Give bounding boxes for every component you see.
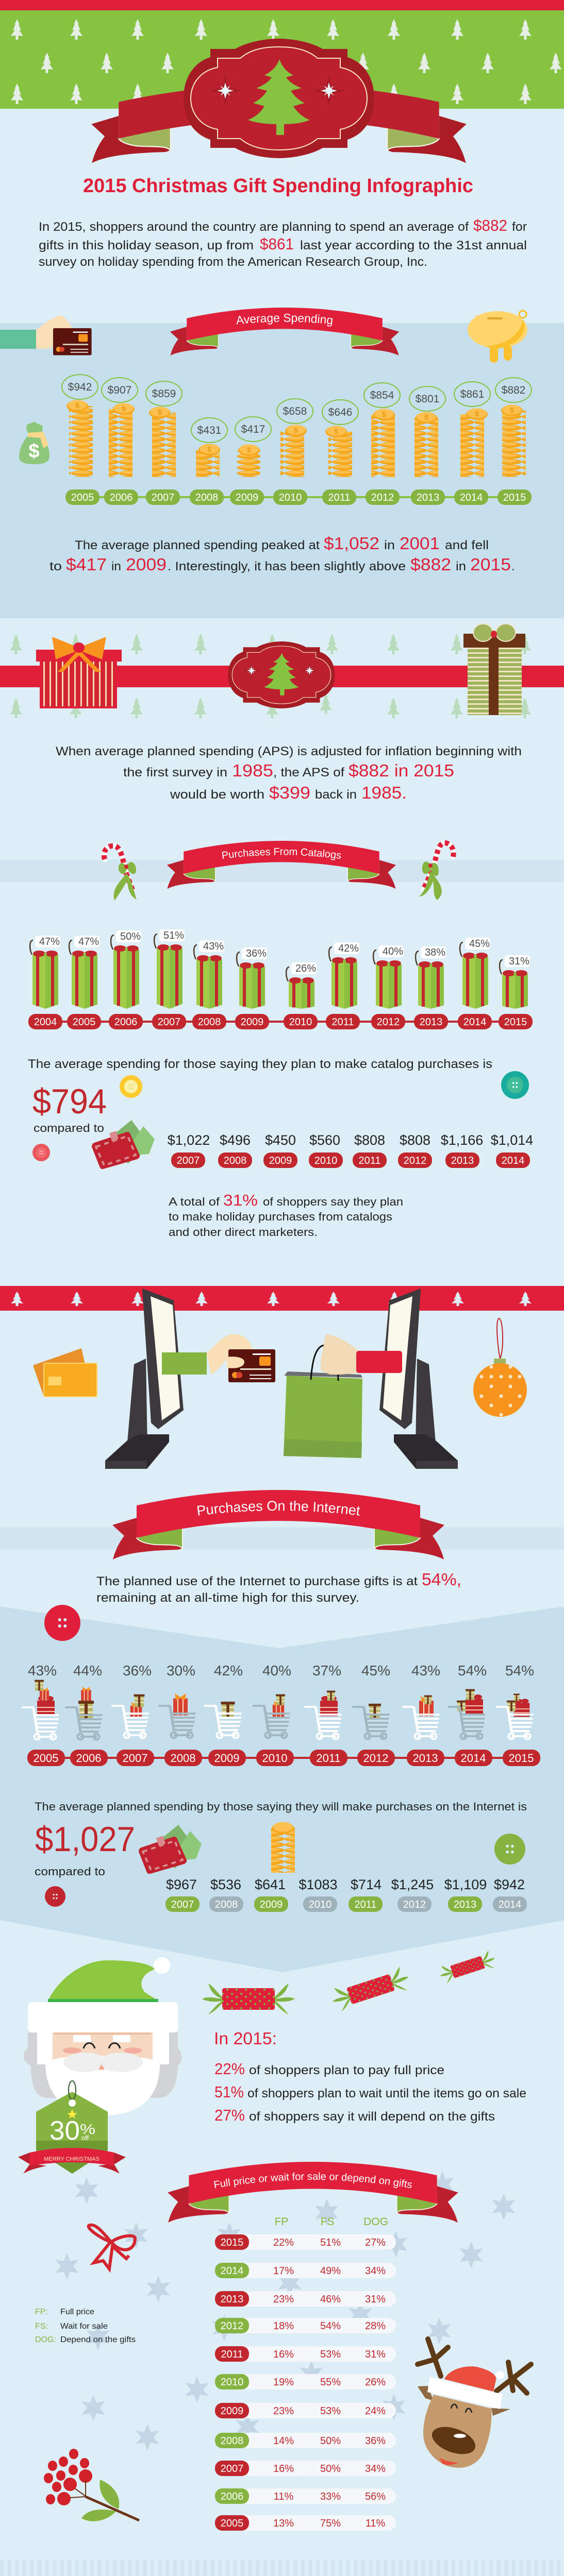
- figure: $1,027: $1,027: [35, 1820, 135, 1859]
- table: full price, wait for sale, depend on gifts by year: 22%: [273, 2237, 294, 2248]
- coin value labels: $658: [283, 405, 307, 417]
- banner: Purchases From Catalogs: [167, 841, 396, 889]
- timeline: 2005-2015 green: 2010: [279, 492, 302, 503]
- text: peak spending: in: [456, 560, 466, 573]
- coin value labels: $431: [197, 425, 221, 436]
- timeline: 2005-2015 green: 2011: [328, 492, 351, 503]
- table: full price, wait for sale, depend on gifts by year: 75%: [320, 2518, 341, 2529]
- chart: gift bars catalog purchases: 51%: [163, 930, 184, 941]
- chart: coin stacks of average spending: $: [247, 446, 251, 454]
- text: peak spending: $417: [66, 555, 107, 574]
- timeline: 2005-2015 red internet: 2014: [461, 1752, 486, 1765]
- text: internet spending: The average planned spending by those saying they will make purchases on the Internet is: [35, 1800, 527, 1813]
- red band: [0, 666, 564, 687]
- timeline: 2004-2015 red: 2004: [34, 1016, 57, 1028]
- chart: gift bars catalog purchases: 45%: [469, 938, 490, 950]
- coin value labels: $907: [108, 384, 131, 396]
- internet spending by year: $1,109: [444, 1877, 487, 1892]
- text: catalog spending: The average spending for those saying they plan to make catalog purchases is: [28, 1057, 492, 1071]
- table: full price, wait for sale, depend on gifts by year: 16%: [273, 2349, 294, 2360]
- table: full price, wait for sale, depend on gifts by year: [215, 2234, 396, 2531]
- text: planned use of internet: The planned use of the Internet to purchase gifts is at: [96, 1574, 418, 1588]
- icon: money bag: $: [28, 440, 40, 462]
- text: planned use of internet: 54%,: [422, 1570, 461, 1589]
- timeline: 2005-2015 red internet: 2007: [123, 1752, 147, 1765]
- text: peak spending: 2009: [126, 555, 167, 574]
- timeline: 2005-2015 green: 2008: [195, 492, 218, 503]
- icon: candies: [202, 1950, 498, 2014]
- icon: shopping bag held by hand: [284, 1334, 402, 1458]
- table: full price, wait for sale, depend on gifts by year: 2013: [221, 2294, 243, 2305]
- intro paragraph: gifts in this holiday season, up from: [39, 239, 254, 252]
- table: full price, wait for sale, depend on gifts by year: 27%: [365, 2237, 386, 2248]
- table: full price, wait for sale, depend on gifts by year: 2009: [221, 2405, 243, 2417]
- table: full price, wait for sale, depend on gifts by year: 24%: [365, 2405, 386, 2417]
- catalog spending by year: 2013: [451, 1155, 474, 1166]
- internet spending by year: [165, 1877, 527, 1912]
- table: full price, wait for sale, depend on gifts by year: 2014: [221, 2265, 243, 2277]
- intro paragraph: $882: [473, 216, 507, 234]
- timeline: 2005-2015 red internet: 2013: [413, 1752, 438, 1765]
- internet spending by year: $1083: [298, 1877, 338, 1892]
- internet spending by year: $536: [210, 1877, 241, 1892]
- timeline: 2004-2015 red: [28, 1014, 533, 1029]
- icon: buttons: [32, 1071, 529, 1161]
- icon: right candy cane: [419, 843, 454, 900]
- chart: coin stacks of average spending: $: [207, 445, 211, 453]
- sale tag 30% off: 30: [49, 2116, 80, 2146]
- text: peak spending: [49, 534, 515, 574]
- catalog spending by year: 2010: [314, 1155, 337, 1166]
- chart: coin stacks of average spending: $: [294, 426, 298, 434]
- table: full price, wait for sale, depend on gifts by year: 2008: [221, 2435, 243, 2447]
- timeline: 2004-2015 red: 2006: [114, 1016, 137, 1028]
- chart: gift bars catalog purchases: 42%: [338, 943, 359, 954]
- text: peak spending: .: [511, 560, 515, 573]
- catalog spending by year: $450: [265, 1132, 296, 1148]
- catalog spending by year: 2011: [358, 1155, 381, 1166]
- icon: money bag: [19, 421, 49, 464]
- table: full price, wait for sale, depend on gifts by year: 23%: [273, 2405, 294, 2417]
- text: peak spending: in: [111, 560, 121, 573]
- catalog spending by year: 2009: [269, 1155, 292, 1166]
- text: peak spending: to: [49, 560, 62, 573]
- icon: wallet with cash: [139, 1825, 202, 1874]
- internet percentages: 40%: [262, 1663, 291, 1679]
- chart: gift bars catalog purchases: 36%: [246, 948, 267, 959]
- table: full price, wait for sale, depend on gifts by year: 53%: [320, 2349, 341, 2360]
- text: peak spending: The average planned spending peaked at: [75, 538, 320, 552]
- chart: gift bars catalog purchases: [30, 929, 530, 1009]
- legend: FP:: [35, 2308, 48, 2316]
- text: inflation adjusted: 1985.: [361, 783, 407, 802]
- icon: right monitor: [379, 1289, 458, 1469]
- table: full price, wait for sale, depend on gifts by year: 56%: [365, 2491, 386, 2502]
- legend: [35, 2308, 136, 2344]
- timeline: 2005-2015 green: 2012: [371, 492, 394, 503]
- icon: coin stack: [271, 1822, 295, 1873]
- text: in 2015 stats: [214, 2029, 526, 2124]
- chart: coin stacks of average spending: $: [75, 401, 79, 410]
- table: full price, wait for sale, depend on gifts by year: 2015: [221, 2237, 243, 2248]
- text: peak spending: . Interestingly, it has been slightly above: [168, 560, 406, 573]
- chart: gift bars catalog purchases: 40%: [383, 946, 403, 957]
- text: inflation adjusted: 1985: [232, 761, 273, 780]
- icon: piggy bank: [468, 311, 527, 363]
- text: peak spending: and fell: [445, 538, 489, 552]
- internet spending by year: 2007: [171, 1899, 194, 1910]
- chart: coin stacks of average spending: $: [122, 404, 126, 413]
- internet percentages: [28, 1663, 534, 1679]
- legend: FS:: [35, 2322, 48, 2331]
- text: inflation adjusted: back in: [315, 788, 357, 802]
- internet percentages: 36%: [123, 1663, 152, 1679]
- catalog spending by year: 2008: [224, 1155, 246, 1166]
- text: peak spending: $1,052: [324, 534, 379, 553]
- internet percentages: 30%: [167, 1663, 195, 1679]
- chart: gift bars catalog purchases: 38%: [425, 947, 445, 958]
- internet spending by year: $714: [351, 1877, 381, 1892]
- internet percentages: 54%: [505, 1663, 534, 1679]
- internet spending by year: 2008: [215, 1899, 238, 1910]
- table: full price, wait for sale, depend on gifts by year: 54%: [320, 2320, 341, 2332]
- text: planned use of internet: remaining at an all-time high for this survey.: [96, 1591, 359, 1605]
- text: inflation adjusted: would be worth: [170, 788, 264, 802]
- timeline: 2004-2015 red: 2008: [198, 1016, 221, 1028]
- table: full price, wait for sale, depend on gifts by year: 11%: [274, 2491, 293, 2502]
- chart: coin stacks of average spending: [62, 375, 532, 477]
- text: 31% of shoppers: [169, 1191, 403, 1239]
- coin value labels: $646: [328, 406, 352, 418]
- banner: Purchases On the Internet: Purchases On the Internet: [197, 1500, 360, 1516]
- text: peak spending: $882: [410, 555, 451, 574]
- catalog spending by year: $1,022: [168, 1132, 210, 1148]
- text: compared to: compared to: [35, 1865, 105, 1878]
- icon: red bow: [89, 2225, 135, 2269]
- chart: gift bars catalog purchases: 43%: [203, 941, 224, 952]
- timeline: 2005-2015 red internet: 2011: [316, 1752, 341, 1765]
- legend: Depend on the gifts: [60, 2335, 136, 2344]
- timeline: 2004-2015 red: 2005: [73, 1016, 95, 1028]
- table: full price, wait for sale, depend on gifts by year: 2005: [221, 2518, 243, 2529]
- timeline: 2005-2015 red internet: 2015: [509, 1752, 534, 1765]
- timeline: 2005-2015 green: 2015: [503, 492, 526, 503]
- timeline: 2004-2015 red: 2007: [158, 1016, 180, 1028]
- internet spending by year: 2013: [454, 1899, 476, 1910]
- icon: left monitor: [105, 1289, 184, 1469]
- banner: Full price or wait for sale or depend on gifts: [168, 2162, 458, 2223]
- icon: left candy cane: [104, 846, 137, 901]
- catalog spending by year: [168, 1132, 533, 1168]
- text: in 2015 stats: of shoppers say it will depend on the gifts: [249, 2110, 495, 2124]
- sale tag 30% off: %: [80, 2121, 95, 2137]
- icon: yellow cards: [33, 1348, 97, 1397]
- banner: Purchases On the Internet: [112, 1490, 444, 1560]
- coin value labels: $417: [241, 423, 265, 435]
- timeline: 2005-2015 red internet: 2006: [76, 1752, 101, 1765]
- timeline: 2005-2015 green: 2013: [417, 492, 439, 503]
- chart: coin stacks of average spending: $: [334, 427, 338, 435]
- timeline: 2004-2015 red: 2009: [241, 1016, 263, 1028]
- timeline: 2004-2015 red: 2013: [420, 1016, 442, 1028]
- icon: hand with credit card: [0, 315, 92, 355]
- icon: orange ornament: [473, 1318, 527, 1417]
- catalog spending by year: $560: [309, 1132, 340, 1148]
- table: full price, wait for sale, depend on gifts by year: 19%: [273, 2377, 294, 2388]
- catalog spending by year: $1,014: [491, 1132, 533, 1148]
- chart: coin stacks of average spending: $: [158, 408, 162, 416]
- small medallion: [228, 641, 335, 708]
- internet spending by year: $942: [494, 1877, 525, 1892]
- table: full price, wait for sale, depend on gifts by year: 31%: [365, 2294, 386, 2305]
- internet spending by year: 2010: [309, 1899, 331, 1910]
- snow flakes: [56, 2171, 516, 2451]
- icon: green striped gift with brown ribbon: [463, 624, 525, 715]
- sale tag 30% off: [18, 2081, 126, 2174]
- text: inflation adjusted: [56, 744, 522, 802]
- icon: wallet with cash: [92, 1120, 155, 1169]
- catalog spending by year: 2012: [404, 1155, 426, 1166]
- intro paragraph: for: [512, 220, 527, 234]
- coin value labels: $861: [460, 388, 484, 400]
- table: full price, wait for sale, depend on gifts by year: 18%: [273, 2320, 294, 2332]
- table: full price, wait for sale, depend on gifts by year: 49%: [320, 2265, 341, 2277]
- sale tag 30% off: MERRY CHRISTMAS: [44, 2156, 99, 2162]
- icon: buttons: [45, 1834, 525, 1907]
- timeline: 2005-2015 red internet: 2008: [171, 1752, 195, 1765]
- text: in 2015 stats: In 2015:: [214, 2029, 277, 2048]
- text: in 2015 stats: 51%: [214, 2083, 244, 2101]
- intro paragraph: In 2015, shoppers around the country are planning to spend an average of: [39, 220, 469, 234]
- text: planned use of internet: [96, 1570, 461, 1605]
- icon: red berries: [44, 2449, 139, 2521]
- internet percentages: 54%: [458, 1663, 487, 1679]
- sale tag 30% off: off: [81, 2134, 89, 2142]
- text: peak spending: in: [384, 538, 395, 552]
- table: full price, wait for sale, depend on gifts by year: 11%: [366, 2518, 385, 2529]
- icon: striped red gift with orange bow: [36, 637, 122, 708]
- timeline: 2005-2015 red internet: 2010: [262, 1752, 287, 1765]
- internet spending by year: $967: [166, 1877, 197, 1892]
- header medallion with tree: [184, 39, 374, 158]
- coin value labels: [68, 381, 525, 436]
- table: full price, wait for sale, depend on gifts by year: 17%: [273, 2265, 294, 2277]
- timeline: 2004-2015 red: 2011: [331, 1016, 354, 1028]
- chart: shopping carts with gifts: [22, 1680, 534, 1739]
- coin value circles: [62, 375, 532, 443]
- text: in 2015 stats: 22%: [214, 2060, 245, 2078]
- table: full price, wait for sale, depend on gifts by year: 26%: [365, 2377, 386, 2388]
- table: full price, wait for sale, depend on gifts by year: 2007: [221, 2463, 243, 2475]
- chart: coin stacks of average spending: $: [510, 406, 514, 414]
- chart: gift bars catalog purchases: 26%: [295, 963, 316, 974]
- text: inflation adjusted: , the APS of: [273, 766, 344, 779]
- chart: gift bars catalog purchases: 31%: [509, 956, 529, 967]
- text: in 2015 stats: 27%: [214, 2106, 245, 2124]
- coin value labels: $859: [152, 388, 176, 400]
- coin value labels: $854: [370, 389, 394, 401]
- legend: Full price: [60, 2308, 94, 2316]
- table: full price, wait for sale, depend on gifts by year: 28%: [365, 2320, 386, 2332]
- text: peak spending: 2015: [470, 555, 511, 574]
- timeline: 2005-2015 red internet: 2012: [363, 1752, 388, 1765]
- red band with trees: [0, 1286, 564, 1311]
- icon: reindeer with Santa hat: [418, 2339, 531, 2468]
- table headers: FS: [321, 2216, 334, 2228]
- internet percentages: 43%: [28, 1663, 57, 1679]
- table headers: FP: [275, 2216, 288, 2228]
- title: 2015 Christmas Gift Spending Infographic: [83, 175, 473, 197]
- table: full price, wait for sale, depend on gifts by year: 14%: [273, 2435, 294, 2447]
- table: full price, wait for sale, depend on gifts by year: 31%: [365, 2349, 386, 2360]
- text: 31% of shoppers: A total of: [169, 1195, 220, 1208]
- figure: $794: $794: [32, 1082, 107, 1121]
- timeline: 2004-2015 red: 2012: [377, 1016, 400, 1028]
- table: full price, wait for sale, depend on gifts by year: 33%: [320, 2491, 341, 2502]
- chart: gift bars catalog purchases: 50%: [120, 931, 141, 942]
- table headers: DOG: [363, 2216, 388, 2228]
- timeline: 2004-2015 red: 2014: [463, 1016, 486, 1028]
- internet spending by year: 2012: [403, 1899, 426, 1910]
- internet spending by year: 2011: [354, 1899, 377, 1910]
- timeline: 2005-2015 green: 2014: [460, 492, 483, 503]
- text: 31% of shoppers: and other direct marketers.: [169, 1226, 318, 1239]
- table: full price, wait for sale, depend on gifts by year: 50%: [320, 2435, 341, 2447]
- table: full price, wait for sale, depend on gifts by year: 36%: [365, 2435, 386, 2447]
- timeline: 2005-2015 green: 2007: [152, 492, 174, 503]
- internet percentages: 44%: [73, 1663, 102, 1679]
- table: full price, wait for sale, depend on gifts by year: 46%: [320, 2294, 341, 2305]
- internet percentages: 43%: [411, 1663, 440, 1679]
- table: full price, wait for sale, depend on gifts by year: 23%: [273, 2294, 294, 2305]
- table: full price, wait for sale, depend on gifts by year: 13%: [273, 2518, 294, 2529]
- timeline: 2005-2015 red internet: [27, 1750, 540, 1766]
- table: full price, wait for sale, depend on gifts by year: 34%: [365, 2265, 386, 2277]
- intro paragraph: last year according to the 31st annual: [300, 239, 527, 252]
- text: inflation adjusted: When average planned spending (APS) is adjusted for inflation beginning with: [56, 744, 522, 758]
- icon: Santa with elf hat: [24, 1957, 181, 2115]
- timeline: 2005-2015 green: 2005: [71, 492, 94, 503]
- table: full price, wait for sale, depend on gifts by year: 2006: [221, 2491, 243, 2502]
- text: compared to: compared to: [34, 1122, 104, 1134]
- text: peak spending: 2001: [400, 534, 440, 553]
- catalog spending by year: 2014: [502, 1155, 524, 1166]
- banner: Average Spending: Average Spending: [236, 313, 333, 327]
- timeline: 2005-2015 green: 2006: [110, 492, 132, 503]
- legend: DOG:: [35, 2335, 56, 2344]
- chart: coin stacks of average spending: $: [475, 410, 479, 418]
- text: in 2015 stats: of shoppers plan to wait until the items go on sale: [247, 2087, 526, 2100]
- internet percentages: 42%: [214, 1663, 243, 1679]
- table: full price, wait for sale, depend on gifts by year: 2011: [221, 2349, 243, 2360]
- icon: red button: [44, 1605, 80, 1641]
- internet percentages: 37%: [312, 1663, 341, 1679]
- tree rows around red band: [10, 634, 531, 718]
- timeline: 2004-2015 red: 2010: [289, 1016, 312, 1028]
- internet spending by year: $641: [255, 1877, 286, 1892]
- text: 31% of shoppers: 31%: [223, 1191, 258, 1209]
- intro paragraph: survey on holiday spending from the American Research Group, Inc.: [39, 255, 427, 269]
- chart: gift bars catalog purchases: 47%: [78, 936, 99, 947]
- timeline: 2005-2015 red internet: 2009: [214, 1752, 239, 1765]
- header tree pattern: [11, 19, 562, 104]
- timeline: 2005-2015 green: 2009: [236, 492, 258, 503]
- catalog spending by year: $808: [400, 1132, 430, 1148]
- text: inflation adjusted: $882 in 2015: [349, 761, 454, 780]
- table: full price, wait for sale, depend on gifts by year: 2010: [221, 2377, 243, 2388]
- chart: coin stacks of average spending: $: [424, 413, 428, 421]
- text: in 2015 stats: of shoppers plan to pay full price: [249, 2063, 444, 2077]
- table: full price, wait for sale, depend on gifts by year: 16%: [273, 2463, 294, 2475]
- text: 31% of shoppers: of shoppers say they plan: [263, 1195, 403, 1208]
- internet spending by year: $1,245: [391, 1877, 434, 1892]
- internet spending by year: 2009: [260, 1899, 283, 1910]
- catalog spending by year: $496: [220, 1132, 251, 1148]
- timeline: 2004-2015 red: 2015: [504, 1016, 527, 1028]
- text: inflation adjusted: $399: [269, 783, 310, 802]
- icon: arm handing credit card: [162, 1334, 275, 1382]
- table: full price, wait for sale, depend on gifts by year: 51%: [320, 2237, 341, 2248]
- text: 31% of shoppers: to make holiday purchases from catalogs: [169, 1210, 392, 1223]
- coin value labels: $801: [416, 393, 439, 405]
- table: full price, wait for sale, depend on gifts by year: 53%: [320, 2405, 341, 2417]
- header ribbon: [91, 84, 467, 163]
- chart: gift bars catalog purchases: 47%: [39, 936, 60, 947]
- text: inflation adjusted: the first survey in: [123, 766, 227, 779]
- table: full price, wait for sale, depend on gifts by year: 55%: [320, 2377, 341, 2388]
- internet percentages: 45%: [361, 1663, 390, 1679]
- catalog spending by year: $808: [354, 1132, 385, 1148]
- catalog spending by year: 2007: [177, 1155, 200, 1166]
- table: full price, wait for sale, depend on gifts by year: 50%: [320, 2463, 341, 2475]
- internet spending by year: 2014: [499, 1899, 521, 1910]
- table headers: [275, 2216, 388, 2228]
- legend: Wait for sale: [60, 2322, 108, 2331]
- timeline: 2005-2015 green: [65, 489, 532, 505]
- table: full price, wait for sale, depend on gifts by year: 2012: [221, 2320, 243, 2332]
- banner: Average Spending: [170, 308, 399, 355]
- chart: coin stacks of average spending: $: [382, 410, 386, 418]
- timeline: 2005-2015 red internet: 2005: [34, 1752, 58, 1765]
- catalog spending by year: $1,166: [441, 1132, 483, 1148]
- table: full price, wait for sale, depend on gifts by year: 34%: [365, 2463, 386, 2475]
- banner: Full price or wait for sale or depend on gifts: Full price or wait for sale or depend on gifts: [214, 2172, 412, 2189]
- coin value labels: $882: [502, 384, 525, 396]
- intro paragraph: [39, 216, 527, 269]
- banner: Purchases From Catalogs: Purchases From Catalogs: [222, 848, 341, 860]
- coin value labels: $942: [68, 381, 92, 393]
- intro paragraph: $861: [260, 235, 294, 253]
